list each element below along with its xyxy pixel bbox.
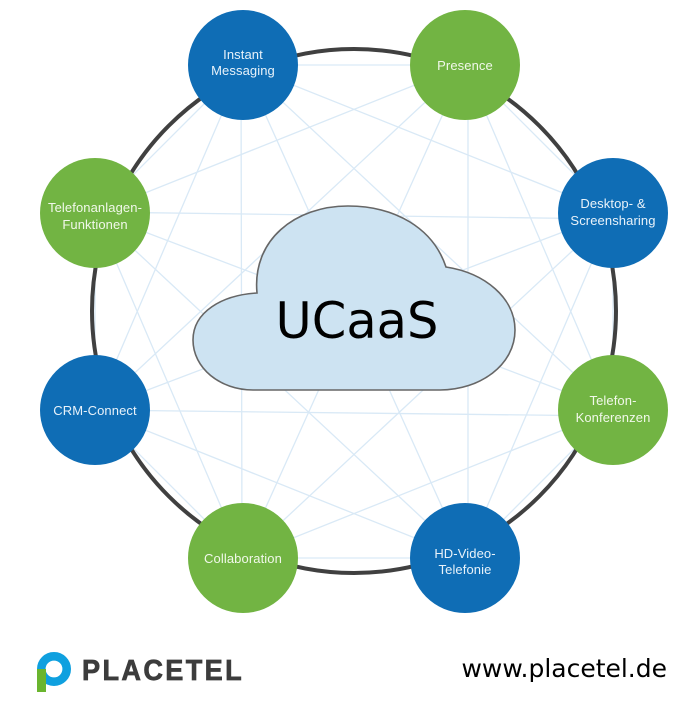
node: HD-Video-Telefonie bbox=[410, 503, 520, 613]
logo: Placetel bbox=[37, 655, 244, 692]
node: Telefonanlagen-Funktionen: Telefonanlagen- bbox=[48, 200, 142, 215]
node: Telefonanlagen-Funktionen: Funktionen bbox=[62, 217, 128, 232]
node: Desktop- & Screensharing bbox=[558, 158, 668, 268]
node: Instant Messaging: Instant bbox=[223, 47, 263, 62]
central cloud: UCaaS bbox=[193, 206, 515, 390]
node: Telefon-Konferenzen: Telefon- bbox=[589, 393, 637, 408]
node: Presence bbox=[410, 10, 520, 120]
node: Desktop- & Screensharing: Desktop- & bbox=[580, 196, 646, 211]
node: HD-Video-Telefonie: Telefonie bbox=[439, 562, 491, 577]
node: HD-Video-Telefonie: HD-Video- bbox=[434, 546, 496, 561]
node: Presence: Presence bbox=[437, 58, 493, 73]
website url: www.placetel.de bbox=[462, 654, 667, 683]
outer ring bbox=[92, 49, 616, 573]
central cloud: UCaaS: UCaaS bbox=[276, 292, 438, 350]
node: Desktop- & Screensharing: Screensharing bbox=[570, 213, 656, 228]
node: Telefonanlagen-Funktionen bbox=[40, 158, 150, 268]
node: Instant Messaging: Messaging bbox=[211, 63, 275, 78]
logo: Placetel: PLACETEL bbox=[82, 655, 244, 687]
node: CRM-Connect bbox=[40, 355, 150, 465]
node: Collaboration: Collaboration bbox=[204, 551, 282, 566]
node: Collaboration bbox=[188, 503, 298, 613]
node: Instant Messaging bbox=[188, 10, 298, 120]
node: Telefon-Konferenzen bbox=[558, 355, 668, 465]
node: Telefon-Konferenzen: Konferenzen bbox=[576, 410, 650, 425]
node: CRM-Connect: CRM-Connect bbox=[53, 403, 137, 418]
